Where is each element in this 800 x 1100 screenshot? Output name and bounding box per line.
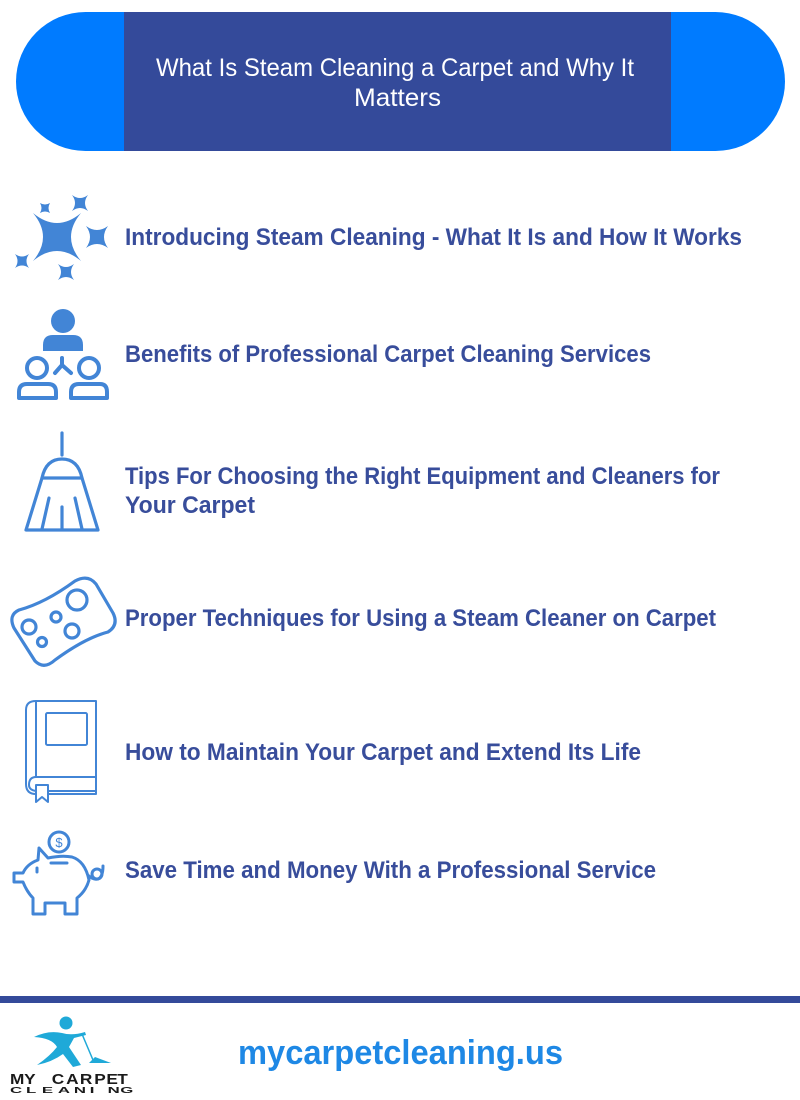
dollar sign: $ — [55, 835, 63, 850]
title: Matters — [354, 84, 441, 112]
icon: sparkles — [15, 195, 108, 280]
logo: my carpet cleaning: CLEANING — [10, 1086, 133, 1095]
icon: people hierarchy — [19, 309, 107, 398]
heading: introducing steam cleaning: Introducing Steam Cleaning - What It Is and How It Works — [125, 224, 742, 251]
website url: mycarpetcleaning.us — [238, 1034, 563, 1072]
footer divider bar — [0, 996, 800, 1003]
header banner — [16, 12, 785, 151]
heading: proper techniques: Proper Techniques for Using a Steam Cleaner on Carpet — [125, 605, 716, 632]
icon: book — [26, 701, 96, 802]
logo: my carpet cleaning: MY CARPET — [10, 1071, 128, 1088]
heading: benefits: Benefits of Professional Carpet Cleaning Services — [125, 341, 651, 368]
heading: save time and money: Save Time and Money With a Professional Service — [125, 857, 656, 884]
heading: how to maintain: How to Maintain Your Carpet and Extend Its Life — [125, 739, 641, 766]
title: What Is Steam Cleaning a Carpet and Why It — [156, 54, 634, 82]
icon: broom — [26, 433, 98, 530]
heading: tips for choosing: Your Carpet — [125, 492, 255, 519]
icon: piggy bank — [14, 832, 103, 914]
heading: tips for choosing: Tips For Choosing the Right Equipment and Cleaners for — [125, 463, 720, 490]
icon: sponge — [12, 578, 115, 665]
logo: my carpet cleaning — [10, 1016, 133, 1095]
